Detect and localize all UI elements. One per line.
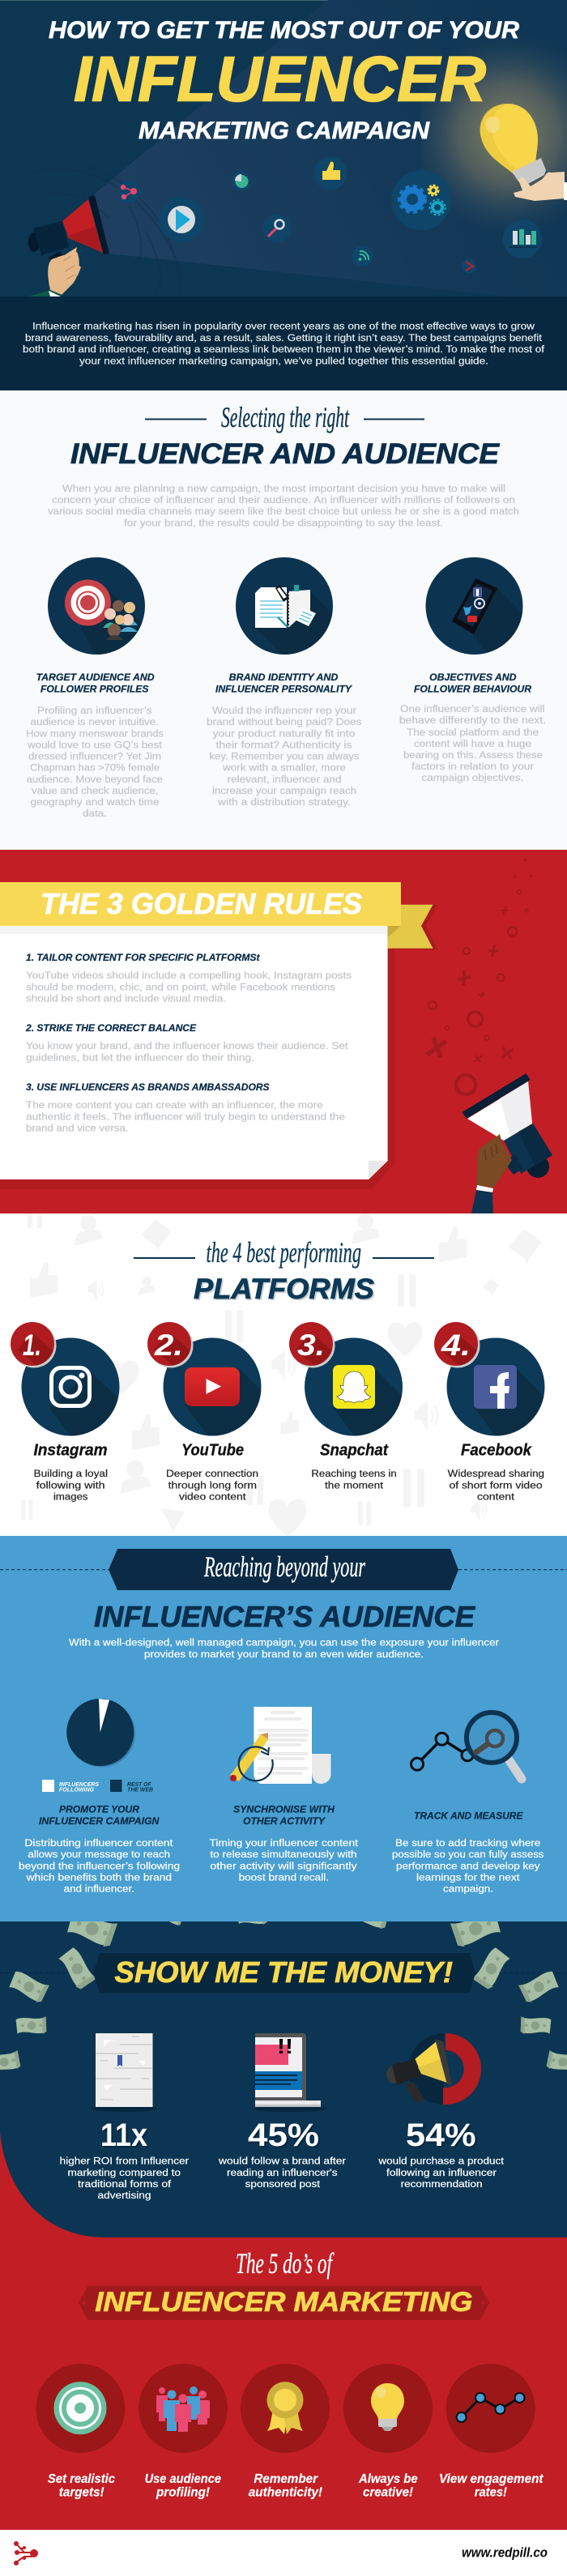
column: brand identity: INFLUENCER PERSONALITY	[215, 684, 353, 695]
icon: target and audience	[48, 557, 145, 655]
banner with script heading: Reaching beyond your	[203, 1550, 366, 1583]
platform: instagram: following with	[36, 1480, 105, 1491]
column: synchronise: boost brand recall.	[239, 1871, 329, 1883]
intro paragraph: concern your choice of influencer and their audience. An influencer with millions of followers on	[52, 494, 515, 505]
heading: platforms: PLATFORMS	[195, 1275, 376, 1307]
ribbon banner: THE 3 GOLDEN RULES	[40, 887, 362, 920]
column: promote: PROMOTE YOUR	[59, 1804, 139, 1815]
intro text: your next influencer marketing campaign, we’ve pulled together this essential guide.	[79, 355, 488, 366]
rule 1: should be modern, chic, and on point, while Facebook mentions	[26, 981, 335, 992]
panel: five do's	[0, 2237, 567, 2530]
column: promote: INFLUENCER CAMPAIGN	[39, 1815, 160, 1827]
column: objectives: behave differently to the next.	[399, 714, 546, 726]
stat: 45%: 45%	[248, 2118, 319, 2153]
icon: magnifier bubble	[262, 214, 291, 243]
platform: instagram: Building a loyal	[34, 1468, 108, 1479]
column: brand identity: BRAND IDENTITY AND	[229, 672, 338, 683]
icon: red megaphone with hand	[28, 195, 109, 296]
column: promote: Distributing influencer content	[24, 1837, 173, 1849]
script heading: The 5 do’s of	[236, 2247, 335, 2280]
panel: selecting the right influencer	[26, 407, 545, 817]
platform: snapchat: 3.	[297, 1329, 325, 1362]
platform: youtube: YouTube	[181, 1442, 244, 1460]
logo	[14, 2541, 38, 2565]
rule 2: 2. STRIKE THE CORRECT BALANCE	[25, 1022, 197, 1034]
background pattern	[21, 1202, 542, 1536]
do: authenticity: authenticity!	[249, 2486, 323, 2500]
chart legend	[42, 1780, 154, 1793]
stat: 11x: traditional forms of	[78, 2178, 172, 2190]
intro text	[23, 321, 545, 366]
icon: wifi bubble	[352, 245, 373, 267]
column: synchronise: other activity will significantly	[210, 1860, 358, 1871]
platform: facebook: Facebook	[461, 1442, 532, 1460]
intro text	[69, 1637, 499, 1660]
title line 3: MARKETING CAMPAIGN	[139, 117, 430, 144]
do: profiling	[139, 2364, 228, 2500]
do: engagement	[439, 2364, 544, 2500]
title: influencer: INFLUENCER	[74, 42, 486, 115]
stat: 11x: advertising	[97, 2190, 151, 2201]
website url: www.redpill.co	[462, 2545, 548, 2561]
panel: three golden rules	[0, 850, 567, 1213]
red corner curve	[0, 2132, 105, 2238]
column: target audience: audience. Move beyond face	[27, 774, 163, 785]
platform: facebook: of short form video	[449, 1480, 543, 1491]
paper card	[0, 926, 395, 1189]
platform: youtube: video content	[179, 1491, 246, 1503]
column: objectives: campaign objectives.	[421, 772, 523, 783]
icon: megaphone and donut	[386, 2033, 481, 2105]
icon: gears bubble	[391, 170, 451, 230]
icon: light bulb and hand	[480, 104, 567, 201]
column: objectives: The social platform and the	[407, 727, 539, 738]
do: creative: Always be	[358, 2472, 418, 2486]
panel: reaching beyond audience	[0, 1536, 567, 1921]
column: brand identity: their format? Authenticity is	[215, 739, 352, 750]
column: promote: which benefits both the brand	[25, 1871, 172, 1883]
column: target audience: would love to use GQ’s best	[27, 739, 163, 750]
column: objectives: bearing on this. Assess these	[403, 749, 543, 761]
rule 2: You know your brand, and the influencer knows their audience. Set	[26, 1040, 348, 1051]
column: synchronise: SYNCHRONISE WITH	[233, 1804, 335, 1815]
column: target audience: data.	[83, 808, 107, 819]
do: creative	[343, 2364, 433, 2500]
platform: facebook: Widespread sharing	[448, 1468, 544, 1479]
column: synchronise: Timing your influencer content	[209, 1837, 359, 1849]
rule 3: brand and vice versa.	[26, 1123, 128, 1134]
do: authenticity	[241, 2364, 330, 2500]
intro text: Influencer marketing has risen in popularity over recent years as one of the most effective ways to grow	[32, 321, 535, 332]
intro paragraph: various social media channels may seem like the best choice but unless he or she is a good match	[48, 505, 519, 517]
icon: documents	[236, 557, 333, 655]
column: target audience: audience is never intuitive.	[31, 716, 159, 727]
platform: youtube: 2.	[154, 1329, 183, 1362]
banner with script heading	[109, 1549, 458, 1590]
rule 2: guidelines, but let the influencer do their thing.	[26, 1051, 254, 1063]
banner heading: INFLUENCER MARKETING	[95, 2287, 472, 2318]
rule 3: 3. USE INFLUENCERS AS BRANDS AMBASSADORS	[26, 1081, 270, 1093]
rule 1	[26, 952, 352, 1004]
do: creative: creative!	[363, 2486, 414, 2500]
column: track and measure: learnings for the next	[416, 1871, 520, 1883]
rule 1: should be short and include visual media.	[26, 993, 226, 1004]
money bills	[0, 1904, 567, 2076]
column: objectives: One influencer’s audience will	[400, 703, 545, 714]
column: target audience: geography and watch time	[31, 796, 160, 808]
platform: facebook: 4.	[441, 1329, 471, 1362]
column: brand identity: Would the influencer rep your	[212, 705, 356, 716]
do: profiling: profiling!	[156, 2486, 211, 2500]
rule 1: 1. TAILOR CONTENT FOR SPECIFIC PLATFORMSt	[26, 952, 260, 963]
column: brand identity: with a distribution strategy.	[217, 796, 351, 808]
stat: 45%: 45%	[249, 2119, 321, 2155]
column: track and measure: possible so you can fully assess	[392, 1849, 544, 1860]
column: promote	[19, 1804, 180, 1894]
icon: document and pencil	[230, 1707, 330, 1784]
do: engagement: View engagement	[439, 2472, 544, 2486]
column: objectives: FOLLOWER BEHAVIOUR	[414, 684, 531, 695]
stat: 54%: recommendation	[401, 2178, 483, 2190]
chart legend: INFLUENCERS	[59, 1781, 99, 1788]
platform: youtube: Deeper connection	[166, 1468, 258, 1479]
platform: facebook	[434, 1322, 544, 1500]
column: objectives	[399, 672, 546, 783]
platform: instagram	[11, 1322, 120, 1502]
do: targets: Set realistic	[48, 2472, 115, 2486]
intro paragraph	[48, 483, 519, 528]
icon: phone with social apps	[426, 557, 523, 655]
column: brand identity: brand without being paid? Does	[207, 716, 361, 727]
do: targets	[36, 2364, 125, 2500]
column: target audience: dressed influencer? Yet Jim	[28, 750, 161, 761]
column: target audience: How many menswear brands	[26, 727, 164, 739]
column: target audience: FOLLOWER PROFILES	[40, 684, 149, 695]
platform: youtube: through long form	[168, 1480, 257, 1491]
intro paragraph: for your brand, the results could be disappointing to say the least.	[124, 517, 443, 528]
column: target audience: TARGET AUDIENCE AND	[36, 672, 155, 683]
icon: network bubble	[117, 181, 139, 203]
rule 3	[26, 1081, 345, 1134]
chart legend: THE WEB	[127, 1785, 154, 1793]
stat: 54%: 54%	[406, 2118, 476, 2153]
do: profiling: Use audience	[145, 2472, 221, 2486]
stat: 54%: 54%	[407, 2119, 478, 2155]
panel: show me the money	[0, 1904, 567, 2238]
icon: white megaphone with hand	[462, 1073, 552, 1213]
panel: header hero	[0, 0, 567, 296]
platform: instagram: images	[53, 1491, 87, 1503]
column: synchronise	[209, 1804, 359, 1883]
stat: 54%: would purchase a product	[377, 2156, 505, 2167]
icon: laptop	[254, 2033, 326, 2112]
icon: pie bubble	[232, 172, 251, 191]
icon: laptop: !!	[277, 2034, 293, 2058]
ribbon banner	[0, 882, 437, 949]
stat: 11x	[60, 2118, 189, 2201]
stat: 45%: would follow a brand after	[218, 2156, 346, 2167]
column: track and measure: campaign.	[443, 1883, 493, 1894]
intro text: provides to market your brand to an even wider audience.	[144, 1648, 424, 1660]
stat: 45%: sponsored post	[245, 2178, 321, 2190]
icon: thumbs up bubble	[314, 157, 347, 190]
banner heading: SHOW ME THE MONEY!	[115, 1955, 453, 1989]
platform: instagram: Instagram	[34, 1442, 107, 1460]
column: brand identity: work with a smaller, more	[222, 762, 346, 774]
stat: 11x: 11x	[102, 2119, 149, 2155]
intro text: both brand and influencer, creating a seamless link between them in the viewer’s mind. To make the most of	[23, 343, 545, 355]
column: target audience: Chapman has >70% female	[30, 762, 160, 774]
column: brand identity: key. Remember you can always	[209, 750, 360, 761]
decorative noughts and crosses	[427, 889, 529, 1094]
intro text: brand awareness, favourability and, as a result, sales. Getting it right isn’t easy. The best campaigns benefit	[25, 332, 543, 343]
column: brand identity: increase your campaign reach	[212, 785, 356, 796]
title line 1: HOW TO GET THE MOST OUT OF YOUR	[49, 17, 519, 44]
intro text: With a well-designed, well managed campaign, you can use the exposure your influencer	[69, 1637, 499, 1648]
stat: 54%	[377, 2118, 505, 2190]
stat: 11x: higher ROI from Influencer	[60, 2156, 189, 2167]
platform: youtube	[147, 1322, 261, 1500]
pie chart	[66, 1699, 135, 1768]
column: target audience	[26, 672, 164, 819]
platform: snapchat: the moment	[325, 1480, 384, 1491]
stat: 45%: reading an influencer's	[227, 2167, 337, 2178]
do: authenticity: Remember	[254, 2472, 318, 2486]
stat: 11x: marketing compared to	[68, 2167, 181, 2178]
platform: facebook: content	[477, 1491, 515, 1503]
do: engagement: rates!	[475, 2486, 508, 2500]
chart legend: FOLLOWING	[59, 1785, 94, 1793]
rule 3: authentic it feels. The influencer will truly begin to understand the	[26, 1111, 345, 1122]
column: promote: allows your message to reach	[28, 1849, 170, 1860]
column: synchronise: OTHER ACTIVITY	[243, 1815, 326, 1827]
column: target audience: value and check audience,	[32, 785, 159, 796]
column: objectives: factors in relation to your	[411, 761, 534, 772]
rule 2	[25, 1022, 348, 1063]
chart legend: REST OF	[127, 1781, 151, 1788]
stat: 45%	[218, 2118, 346, 2190]
icon: document	[91, 2033, 157, 2112]
column: synchronise: to release simultaneously with	[210, 1849, 357, 1860]
platform: snapchat	[289, 1322, 403, 1489]
panel: four best platforms	[0, 1202, 567, 1536]
column: objectives: content will have a huge	[414, 738, 531, 749]
intro paragraph: When you are planning a new campaign, the most important decision you have to make will	[62, 483, 505, 494]
stat: 54%: following an influencer	[386, 2167, 497, 2178]
column: track and measure: Be sure to add tracking where	[395, 1837, 541, 1849]
column: objectives: OBJECTIVES AND	[429, 672, 517, 683]
do: targets: targets!	[59, 2486, 104, 2500]
icon: graph and magnifier	[411, 1712, 522, 1779]
rule 1: YouTube videos should include a compelling hook, Instagram posts	[26, 970, 352, 981]
platform: snapchat: Snapchat	[320, 1442, 389, 1460]
column: target audience: Profiling an influencer’s	[37, 705, 152, 716]
column: promote: beyond the influencer’s following	[19, 1860, 180, 1871]
platform: instagram: 1.	[23, 1329, 41, 1362]
platform: snapchat: Reaching teens in	[311, 1468, 397, 1479]
column: brand identity: your product naturally fit into	[212, 727, 356, 739]
column: track and measure: TRACK AND MEASURE	[414, 1810, 523, 1822]
column: track and measure	[392, 1810, 544, 1894]
script heading: the 4 best performing	[206, 1236, 361, 1269]
heading: platforms: PLATFORMS	[194, 1273, 374, 1305]
column: brand identity	[207, 672, 361, 808]
main heading: INFLUENCER’S AUDIENCE	[94, 1600, 475, 1633]
rule 3: The more content you can create with an influencer, the more	[26, 1099, 323, 1111]
icon: bar chart bubble	[503, 220, 542, 258]
icon: play bubble	[159, 197, 204, 242]
panel: footer	[0, 2530, 567, 2576]
stat: 11x: 11x	[100, 2118, 147, 2153]
main heading: INFLUENCER AND AUDIENCE	[70, 438, 501, 470]
column: brand identity: relevant, influencer and	[227, 774, 342, 785]
column: promote: and influencer.	[64, 1883, 134, 1894]
icon: share bubble	[462, 259, 476, 274]
script heading: Selecting the right	[221, 401, 350, 433]
column: track and measure: performance and develop key	[396, 1860, 540, 1871]
panel: introduction	[0, 296, 567, 390]
